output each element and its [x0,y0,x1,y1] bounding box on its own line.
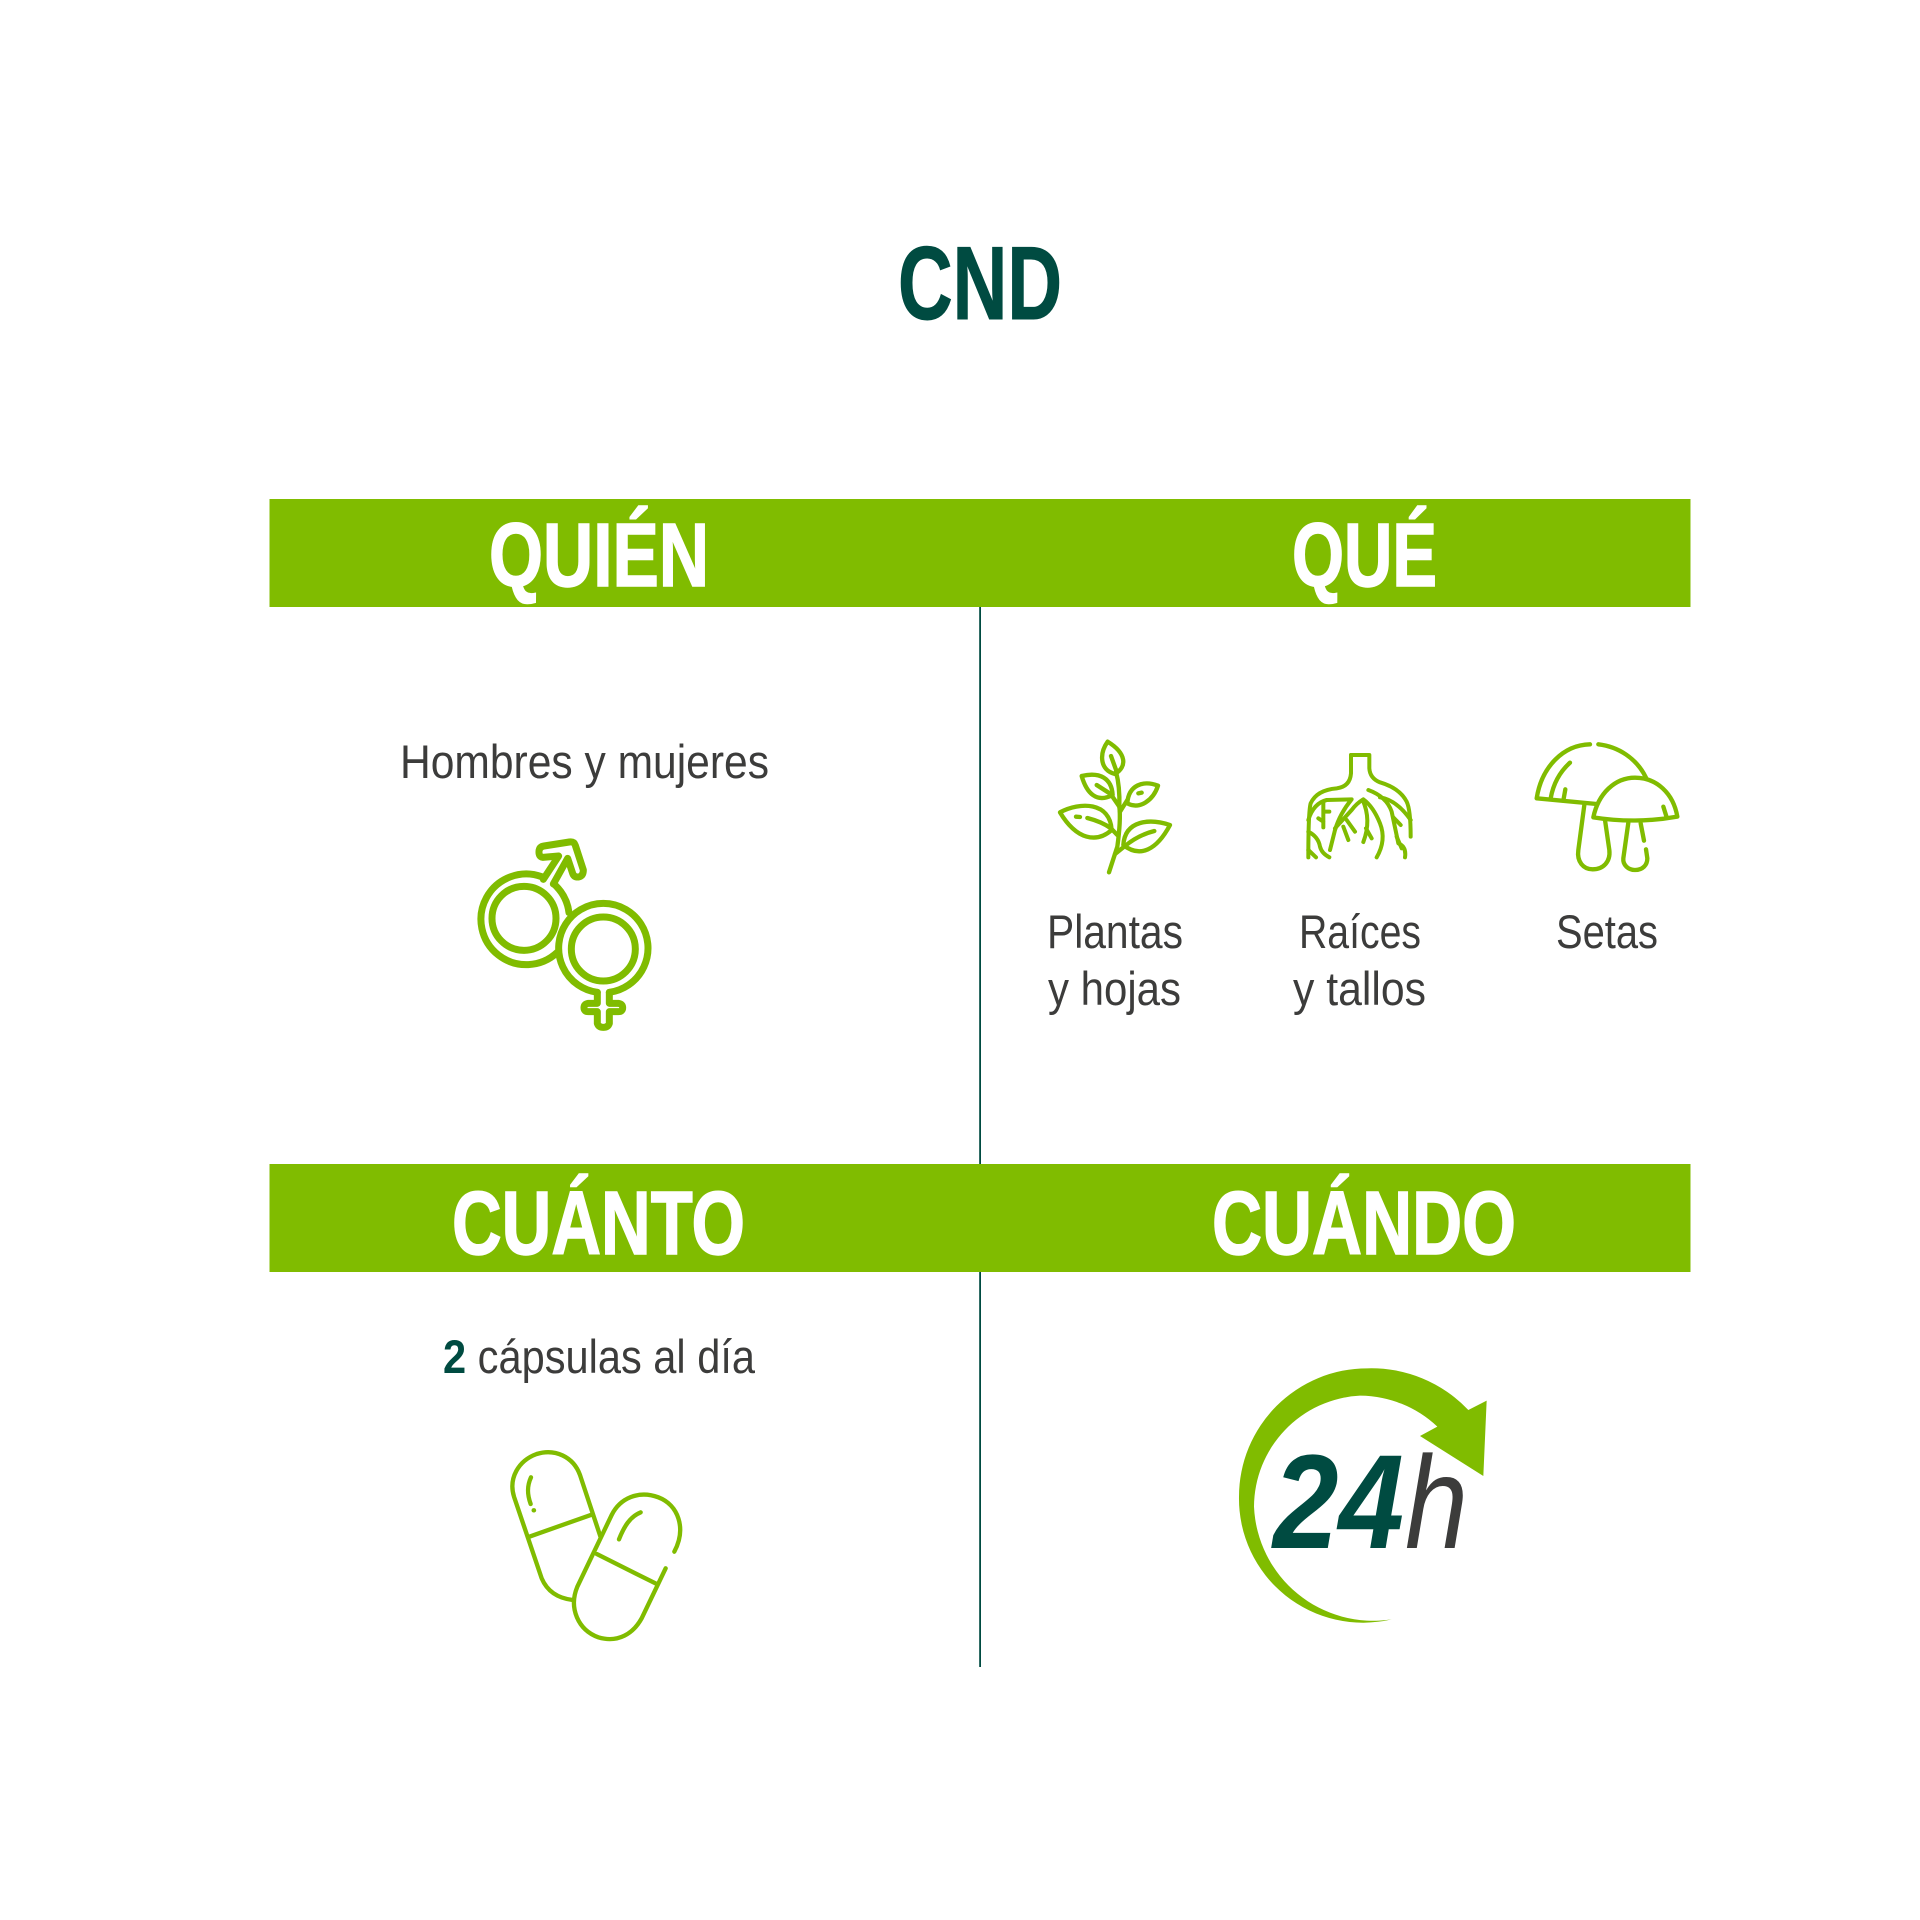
label: raíces y tallos: Raíces [1299,905,1421,958]
title: CND [898,226,1062,342]
panel: quién [270,499,1690,1027]
text: hombres y mujeres: Hombres y mujeres [400,735,769,788]
number: 24: 24 [1270,1428,1404,1577]
icon: gender symbols [481,842,648,1027]
icon: mushrooms [1537,744,1677,870]
panel: cuánto [270,1164,1690,1639]
label: setas: Setas [1556,905,1658,958]
heading bar: cuánto y cuándo [270,1164,1690,1272]
panel: qué [1047,505,1677,1015]
heading: qué: QUÉ [1292,505,1437,606]
label: plantas y hojas: Plantas [1047,905,1183,958]
label: plantas y hojas [1047,905,1183,1015]
icon: roots and stems [1308,755,1411,857]
icon: capsules [512,1452,680,1639]
label: raíces y tallos: y tallos [1293,962,1426,1015]
panel: cuándo [1212,1173,1516,1623]
text: 2 cápsulas al día: 2 cápsulas al día [443,1330,756,1383]
circular arrow [1239,1368,1487,1623]
letter: h: h [1405,1429,1468,1576]
label: raíces y tallos [1293,905,1426,1015]
heading: cuánto: CUÁNTO [452,1173,745,1274]
icon: plant leaves [1060,742,1170,872]
heading: cuándo: CUÁNDO [1212,1173,1516,1274]
label: plantas y hojas: y hojas [1048,962,1181,1015]
heading: quién: QUIÉN [489,505,709,606]
icon: 24h circular arrow [1239,1368,1487,1623]
heading bar: quién y qué [270,499,1690,607]
